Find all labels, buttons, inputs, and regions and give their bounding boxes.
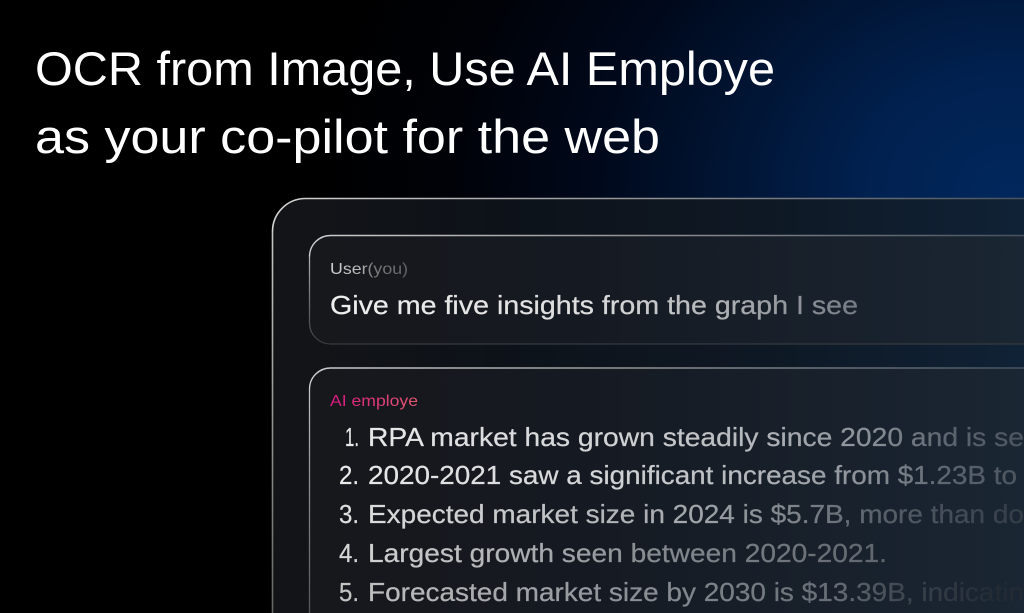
user label: User(you) [330,261,408,278]
AI label: AI employe [330,393,418,410]
insights list: Expected market size in 2024 is $5.7B, more than do [368,499,1024,529]
user question: Give me five insights from the graph I see [330,290,858,320]
insights list: 2020-2021 saw a significant increase from $1.23B to [368,460,1017,490]
insights list: Largest growth seen between 2020-2021. [368,538,887,568]
panel: AI response [310,368,1024,613]
insights list: 1. [345,422,359,452]
insights list: 4. [339,538,359,568]
title: OCR from Image, Use AI Employe [35,42,775,95]
insights list: 2. [339,460,359,490]
panel: chat window [272,198,1024,613]
panel: user message [310,236,1024,344]
title [35,42,775,163]
insights list: Forecasted market size by 2030 is $13.39B, indicatin [368,577,1024,607]
insights list: RPA market has grown steadily since 2020 and is se [368,422,1024,452]
insights list: 5. [339,577,359,607]
insights list: 3. [339,499,359,529]
title: as your co-pilot for the web [35,110,660,163]
insights list [339,422,1024,607]
